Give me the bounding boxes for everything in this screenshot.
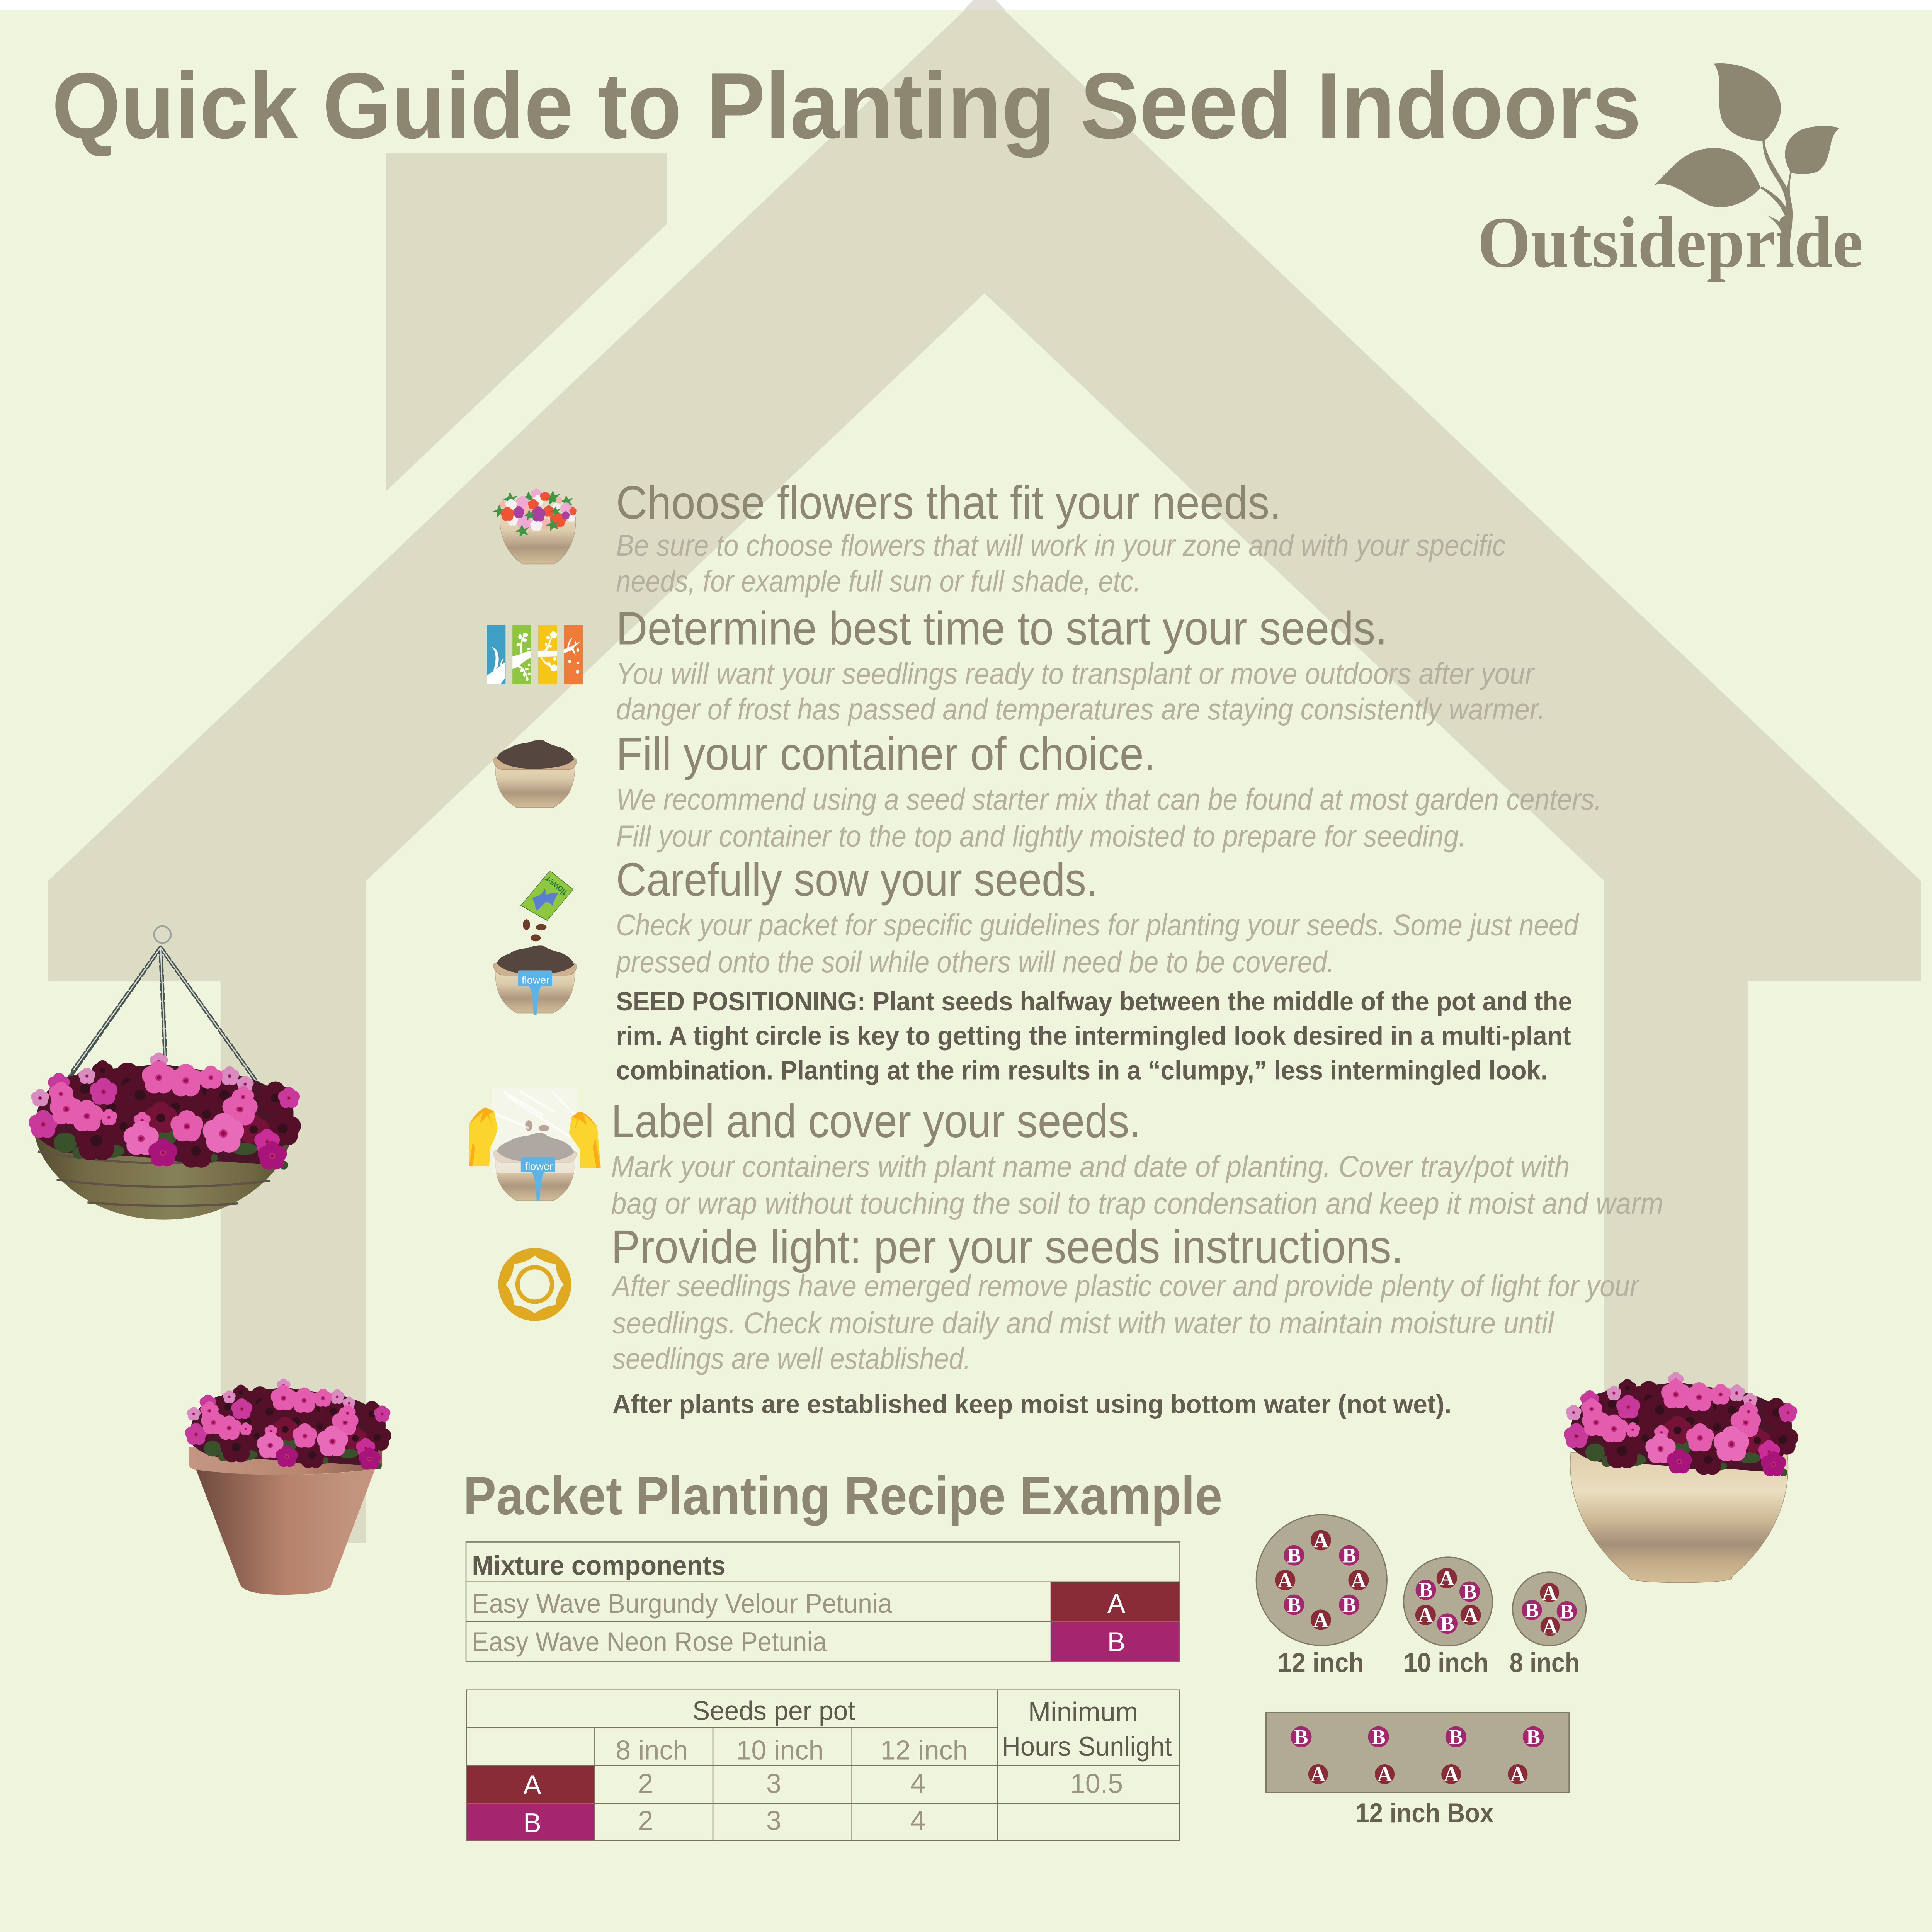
- icon: covered bowl with gloves: [469, 1088, 601, 1201]
- diagram: 12 inch pot: A: [1313, 1608, 1328, 1631]
- title: Quick Guide to Planting Seed Indoors: [52, 54, 1641, 158]
- diagram: 12 inch pot: B: [1342, 1544, 1356, 1567]
- diagram: 12 inch pot: A: [1313, 1529, 1328, 1552]
- left glove: [469, 1108, 498, 1166]
- table: seeds per pot: Hours Sunlight: [1002, 1731, 1172, 1762]
- step 6 heading: Provide light: per your seeds instructions.: [611, 1220, 1403, 1273]
- summer bar: [538, 625, 557, 684]
- step 6 text: [611, 1220, 1640, 1419]
- logo wordmark: Outsidepride: [1477, 202, 1863, 282]
- step 4 body: Check your packet for specific guidelines for planting your seeds. Some just need: [616, 908, 1579, 942]
- step 6 text: seedlings are well established.: [612, 1342, 971, 1376]
- step 1 text: [616, 476, 1506, 598]
- autumn bar: [564, 625, 583, 684]
- covered plant tag: [521, 1157, 555, 1201]
- logo leaves and stem: [1655, 63, 1840, 265]
- table: mixture components: [466, 1542, 1180, 1662]
- diagram: 12 inch pot: B: [1287, 1594, 1301, 1617]
- step 1 text: needs, for example full sun or full shade, etc.: [616, 564, 1141, 598]
- table: seeds per pot: 10 inch: [736, 1735, 824, 1765]
- step 5 text: bag or wrap without touching the soil to trap condensation and keep it moist and warm: [611, 1186, 1663, 1220]
- terracotta pot with petunias: [185, 1379, 391, 1595]
- covered tag label: flower: [525, 1160, 553, 1172]
- house silhouette background: [48, 0, 1921, 1543]
- step 6 body: After seedlings have emerged remove plastic cover and provide plenty of light for your: [611, 1269, 1640, 1303]
- diagram: 12 inch box: A: [1311, 1763, 1326, 1786]
- step 4 text: rim. A tight circle is key to getting the intermingled look desired in a multi-plant: [616, 1021, 1571, 1051]
- row A values: A: [523, 1769, 541, 1800]
- plastic film: [492, 1088, 577, 1173]
- step 3 body: We recommend using a seed starter mix that can be found at most garden centers.: [616, 782, 1602, 816]
- covered bowl: [493, 1133, 577, 1201]
- cream pot with petunias: [1564, 1372, 1798, 1583]
- icon: sun: [498, 1248, 571, 1321]
- step 3 heading: Fill your container of choice.: [616, 728, 1156, 780]
- header: seeds per pot: Seeds per pot: [692, 1696, 855, 1726]
- tag label: flower: [522, 974, 549, 986]
- logo: Outsidepride: [1477, 63, 1863, 282]
- label: 10 inch: 10 inch: [1403, 1647, 1488, 1678]
- diagram: 10 inch pot: A: [1418, 1604, 1433, 1627]
- diagram: 12 inch box: A: [1377, 1763, 1392, 1786]
- step 6 text: seedlings. Check moisture daily and mist with water to maintain moisture until: [612, 1306, 1554, 1340]
- diagram: 12 inch pot: [1256, 1515, 1387, 1678]
- terracotta pot: [189, 1447, 382, 1595]
- diagram: 10 inch pot: B: [1463, 1580, 1477, 1603]
- diagram: 10 inch pot: [1403, 1557, 1492, 1678]
- row B: Easy Wave Neon Rose Petunia: [472, 1626, 827, 1657]
- table: seeds per pot: 4: [910, 1768, 925, 1799]
- step 2 text: danger of frost has passed and temperatures are staying consistently warmer.: [616, 692, 1545, 726]
- diagram: 10 inch pot: A: [1463, 1604, 1478, 1627]
- packet label: flower: [543, 874, 569, 898]
- seed packet: [521, 871, 573, 920]
- diagram: 8 inch pot: A: [1542, 1581, 1557, 1604]
- table: seeds per pot: 2: [638, 1805, 653, 1835]
- diagram: 12 inch box: [1266, 1713, 1569, 1828]
- diagram: 12 inch box: A: [1444, 1763, 1459, 1786]
- basket bowl: [34, 1132, 293, 1220]
- table: seeds per pot: 10.5: [1070, 1768, 1123, 1799]
- bottom water note: After plants are established keep moist using bottom water (not wet).: [612, 1389, 1451, 1419]
- step 4 text: pressed onto the soil while others will need be to be covered.: [616, 945, 1334, 979]
- table: mixture components: B: [1107, 1626, 1125, 1657]
- pot size headers: 8 inch: [616, 1735, 688, 1765]
- hanging basket with petunias: [29, 926, 301, 1220]
- diagram: 12 inch pot: A: [1277, 1569, 1293, 1592]
- diagram: 12 inch box: B: [1294, 1725, 1308, 1748]
- spring bar: [512, 625, 531, 684]
- plant tag: [518, 970, 552, 1015]
- icon: soil bowl: [493, 740, 577, 808]
- terracotta petunias: [185, 1379, 391, 1469]
- diagram: 8 inch pot: B: [1560, 1600, 1574, 1623]
- label: 12 inch: 12 inch: [1278, 1647, 1364, 1678]
- basket petunias: [29, 1052, 301, 1170]
- step 3 text: [616, 728, 1602, 853]
- row A: Easy Wave Burgundy Velour Petunia: [472, 1588, 893, 1619]
- label: 12 inch box: 12 inch Box: [1355, 1798, 1493, 1828]
- diagram: 10 inch pot: A: [1439, 1567, 1454, 1590]
- diagram: 12 inch pot: B: [1342, 1594, 1356, 1617]
- step 5 text: [611, 1095, 1663, 1220]
- step 1 body: Be sure to choose flowers that will work in your zone and with your specific: [616, 528, 1506, 562]
- step 2 body: You will want your seedlings ready to transplant or move outdoors after your: [616, 656, 1535, 690]
- falling seeds: [523, 919, 547, 941]
- diagram: 10 inch pot: B: [1440, 1612, 1454, 1635]
- header: minimum hours sunlight: Minimum: [1028, 1697, 1138, 1727]
- diagram: 10 inch pot: B: [1419, 1578, 1433, 1602]
- step 5 body: Mark your containers with plant name and date of planting. Cover tray/pot with: [611, 1149, 1570, 1183]
- row B values: B: [523, 1808, 541, 1838]
- step 2 heading: Determine best time to start your seeds.: [616, 602, 1388, 655]
- step 4 text: combination. Planting at the rim results in a “clumpy,” less intermingled look.: [616, 1055, 1548, 1085]
- seed positioning note: SEED POSITIONING: Plant seeds halfway between the middle of the pot and the: [616, 986, 1572, 1016]
- diagram: 12 inch box: B: [1372, 1725, 1386, 1748]
- diagram: 12 inch box: A: [1510, 1763, 1526, 1786]
- table header: Mixture components: [472, 1550, 726, 1580]
- step 1 heading: Choose flowers that fit your needs.: [616, 476, 1281, 529]
- cream pot petunias: [1564, 1372, 1798, 1476]
- table: seeds per pot: 3: [766, 1805, 781, 1835]
- table: seeds per pot: 4: [910, 1805, 925, 1835]
- right glove: [569, 1112, 601, 1168]
- basket chains: [34, 926, 265, 1128]
- bowl of soil: [493, 945, 577, 1013]
- table: seeds per pot: 2: [638, 1768, 653, 1799]
- diagram: 12 inch box: B: [1449, 1725, 1463, 1748]
- covered seeds: [525, 1120, 549, 1142]
- table: mixture components: A: [1107, 1588, 1126, 1619]
- diagram: 12 inch pot: B: [1287, 1544, 1301, 1567]
- table: seeds per pot: [466, 1690, 1180, 1841]
- diagram: 12 inch pot: A: [1351, 1569, 1366, 1592]
- label: 8 inch: 8 inch: [1510, 1647, 1580, 1678]
- cream pot: [1570, 1452, 1788, 1583]
- icon: flower bowl: [492, 489, 577, 564]
- table: seeds per pot: 12 inch: [880, 1735, 968, 1765]
- step 3 text: Fill your container to the top and lightly moisted to prepare for seeding.: [616, 819, 1466, 853]
- step 4 heading: Carefully sow your seeds.: [616, 853, 1098, 906]
- step 4 text: [616, 853, 1579, 1085]
- diagram: 12 inch box: B: [1526, 1725, 1540, 1748]
- table: seeds per pot: 3: [766, 1768, 781, 1799]
- icon: four seasons: [487, 625, 583, 684]
- step 2 text: [616, 602, 1545, 726]
- diagram: 8 inch pot: [1510, 1572, 1586, 1678]
- winter bar: [487, 625, 505, 684]
- section heading: packet planting recipe: Packet Planting Recipe Example: [463, 1465, 1222, 1526]
- step 5 heading: Label and cover your seeds.: [611, 1095, 1141, 1147]
- diagram: 8 inch pot: B: [1525, 1599, 1539, 1622]
- diagram: 8 inch pot: A: [1543, 1615, 1558, 1638]
- icon: sowing seeds: [493, 871, 577, 1015]
